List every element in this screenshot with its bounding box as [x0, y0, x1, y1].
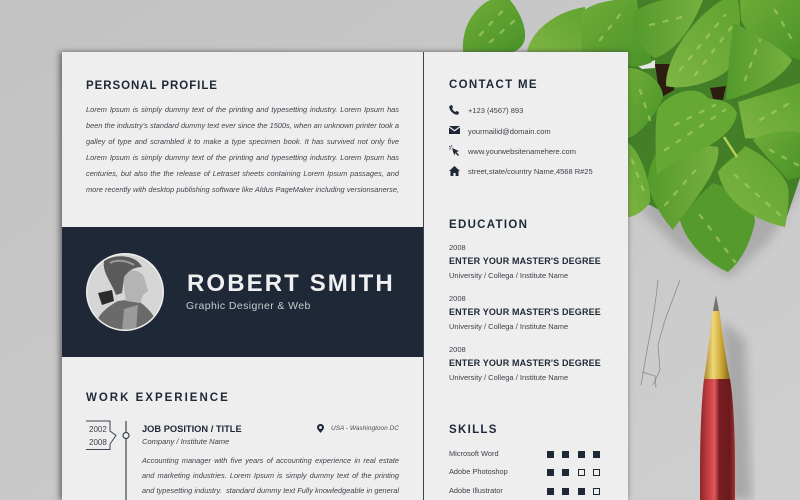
- heading: SKILLS: [449, 424, 498, 436]
- panel: education: [449, 218, 601, 382]
- date tag and timeline: [86, 420, 130, 500]
- education entry: 2008: [449, 294, 466, 303]
- phone: +123 (4567) 893: [468, 106, 523, 114]
- profile text: more recently with desktop publishing software like Aldus PageMaker including versionsanerse,: [86, 185, 399, 194]
- profile text: galley of type and scrambled it to make a type specimen book. It has survived not only five: [86, 137, 399, 146]
- education entry: University / Collega / Institute Name: [449, 322, 568, 331]
- leaf: [753, 131, 800, 180]
- panel: personal profile: [86, 80, 400, 194]
- leaf: [648, 140, 718, 230]
- column divider: [423, 52, 424, 500]
- profile text: Lorem Ipsum is simply dummy text of the printing and typesetting industry. Lorem Ipsum has: [86, 153, 399, 162]
- portrait photo: [86, 253, 164, 331]
- leaf: [633, 0, 703, 58]
- leaf: [628, 143, 650, 217]
- education entry: [449, 294, 601, 331]
- company: Company / Institute Name: [142, 437, 229, 446]
- marble cracks: [641, 280, 680, 388]
- job description: and marketing industries. Lorem Ipsum is simply dummy text of the printing: [142, 471, 399, 480]
- date tag and timeline: 2008: [89, 438, 107, 447]
- heading: CONTACT ME: [449, 79, 538, 91]
- email: yourmailid@domain.com: [468, 126, 551, 136]
- plant shadow: [640, 150, 800, 278]
- skill row: word: Microsoft Word: [449, 449, 499, 458]
- icon: house: [449, 166, 460, 176]
- leaf: [582, 0, 652, 66]
- profile text: [86, 105, 400, 194]
- pen shadow: [722, 320, 752, 500]
- profile text: centuries, but also the the release of Letraset sheets containing Lorem Ipsum passages, and: [86, 169, 399, 178]
- education entry: ENTER YOUR MASTER'S DEGREE: [449, 256, 601, 266]
- panel: name banner: [62, 227, 423, 357]
- job title: JOB POSITION / TITLE: [142, 424, 242, 434]
- education entry: 2008: [449, 243, 466, 252]
- skill row: photoshop: Adobe Photoshop: [449, 467, 508, 476]
- skill row: word: [449, 449, 600, 458]
- leaf streaks: [480, 8, 798, 262]
- pen: [700, 295, 735, 500]
- leaf: [656, 91, 737, 175]
- education entry: 2008: [449, 344, 466, 354]
- date tag and timeline: 2002: [89, 425, 107, 434]
- education entry: University / Collega / Institute Name: [449, 271, 568, 280]
- icon: phone: [449, 105, 459, 115]
- leaf: [527, 7, 585, 52]
- education entry: ENTER YOUR MASTER'S DEGREE: [449, 358, 601, 368]
- profile text: been the industry's standard dummy text ever since the 1500s, when an unknown printer took a: [86, 121, 399, 130]
- leaf stem: [724, 137, 737, 157]
- education entry: University / Collega / Institute Name: [449, 373, 568, 382]
- leaf: [726, 23, 792, 100]
- education entry: ENTER YOUR MASTER'S DEGREE: [449, 306, 601, 316]
- panel: contact: [449, 79, 593, 176]
- heading: PERSONAL PROFILE: [86, 80, 218, 92]
- job description: Accounting manager with five years of accounting experience in real estate: [142, 456, 399, 465]
- panel: skills: [449, 424, 600, 495]
- skill row: illustrator: [449, 486, 600, 495]
- leaf: [666, 0, 740, 87]
- leaf: [463, 0, 525, 52]
- education entry: [449, 344, 601, 382]
- plant: [463, 0, 800, 272]
- heading: EDUCATION: [449, 218, 528, 230]
- education entry: [449, 243, 601, 280]
- leaf: [740, 0, 800, 60]
- job title: Graphic Designer & Web: [186, 300, 311, 312]
- leaf: [738, 83, 800, 140]
- website: www.yourwebsitenamehere.com: [468, 146, 576, 156]
- leaf: [718, 146, 789, 227]
- profile text: Lorem Ipsum is simply dummy text of the printing and typesetting industry. Lorem Ipsum has: [86, 105, 399, 114]
- name: ROBERT SMITH: [187, 270, 395, 297]
- leaf: [680, 183, 755, 272]
- job description: and typesetting industry. standard dummy text Fully knowledgeable in general: [142, 486, 399, 495]
- icon: cursor: [449, 145, 459, 156]
- panel: work experience: [86, 392, 400, 500]
- skill row: photoshop: [449, 467, 600, 476]
- icon: location pin: [317, 424, 324, 433]
- skill row: illustrator: Adobe Illustrator: [449, 486, 503, 495]
- heading: WORK EXPERIENCE: [86, 392, 230, 404]
- location: USA - Washingtoon DC: [331, 424, 399, 432]
- resume paper: [62, 52, 628, 500]
- address: street,state/country Name,4568 R#25: [468, 167, 593, 176]
- job description: [142, 456, 400, 495]
- icon: mail: [449, 126, 460, 134]
- leaf: [628, 68, 663, 138]
